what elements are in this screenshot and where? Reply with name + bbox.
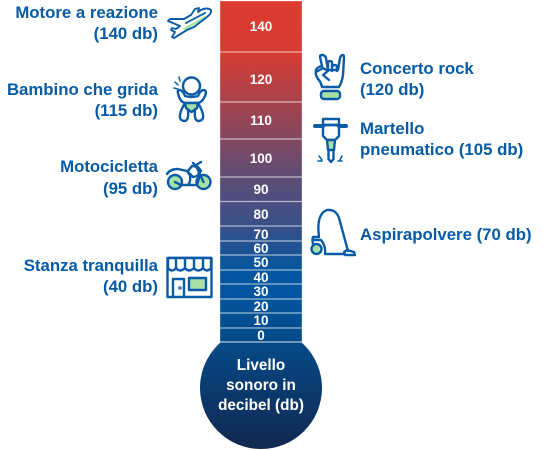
scale numbers: 70 (253, 227, 269, 242)
bulb label: sonoro in (226, 377, 296, 394)
label: Motore a reazione: (140 db) (94, 24, 158, 43)
scale numbers: 10 (253, 313, 269, 328)
label: Motocicletta: Motocicletta (60, 157, 159, 176)
label: Bambino che grida: (115 db) (95, 101, 158, 120)
scale numbers: 100 (250, 151, 272, 166)
thermometer column (220, 1, 302, 342)
scale numbers: 20 (253, 299, 269, 314)
label: Martello pneumatico: pneumatico (105 db) (360, 140, 523, 159)
label: Aspirapolvere: Aspirapolvere (70 db) (360, 225, 532, 244)
scale numbers (250, 19, 272, 343)
label: Motocicletta (60, 157, 159, 198)
label: Martello pneumatico (360, 119, 523, 159)
scale numbers: 80 (253, 207, 269, 222)
icon: shop (168, 258, 212, 297)
icon: vacuum cleaner (312, 210, 355, 255)
scale numbers: 30 (253, 284, 269, 299)
icon: jackhammer (315, 119, 346, 162)
thermometer (200, 1, 322, 449)
icon: motorcycle (167, 162, 210, 189)
label: Concerto rock (360, 59, 474, 99)
bulb label (218, 357, 304, 414)
scale numbers: 0 (257, 328, 265, 343)
bulb label: Livello (237, 357, 285, 374)
icon: airplane (168, 8, 211, 38)
scale numbers: 140 (250, 19, 272, 34)
label: Stanza tranquilla (24, 256, 159, 296)
scale numbers: 60 (253, 241, 269, 256)
label: Motore a reazione: Motore a reazione (15, 3, 158, 22)
scale numbers: 110 (250, 113, 272, 128)
label: Stanza tranquilla: (40 db) (103, 277, 158, 296)
scale numbers: 120 (250, 72, 272, 87)
bulb label: decibel (db) (218, 397, 304, 414)
label: Motore a reazione (15, 3, 158, 43)
scale numbers: 90 (253, 182, 269, 197)
label: Stanza tranquilla: Stanza tranquilla (24, 256, 159, 275)
icon: rock hand (316, 55, 344, 99)
label: Bambino che grida (7, 80, 159, 120)
scale numbers: 50 (253, 255, 269, 270)
scale numbers: 40 (253, 270, 269, 285)
label: Bambino che grida: Bambino che grida (7, 80, 159, 99)
label: Motocicletta: (95 db) (103, 179, 158, 198)
thermometer bulb (200, 327, 322, 449)
label: Concerto rock: Concerto rock (360, 59, 474, 78)
label: Martello pneumatico: Martello (360, 119, 424, 138)
icon: crying baby (174, 77, 206, 121)
label: Concerto rock: (120 db) (360, 80, 424, 99)
